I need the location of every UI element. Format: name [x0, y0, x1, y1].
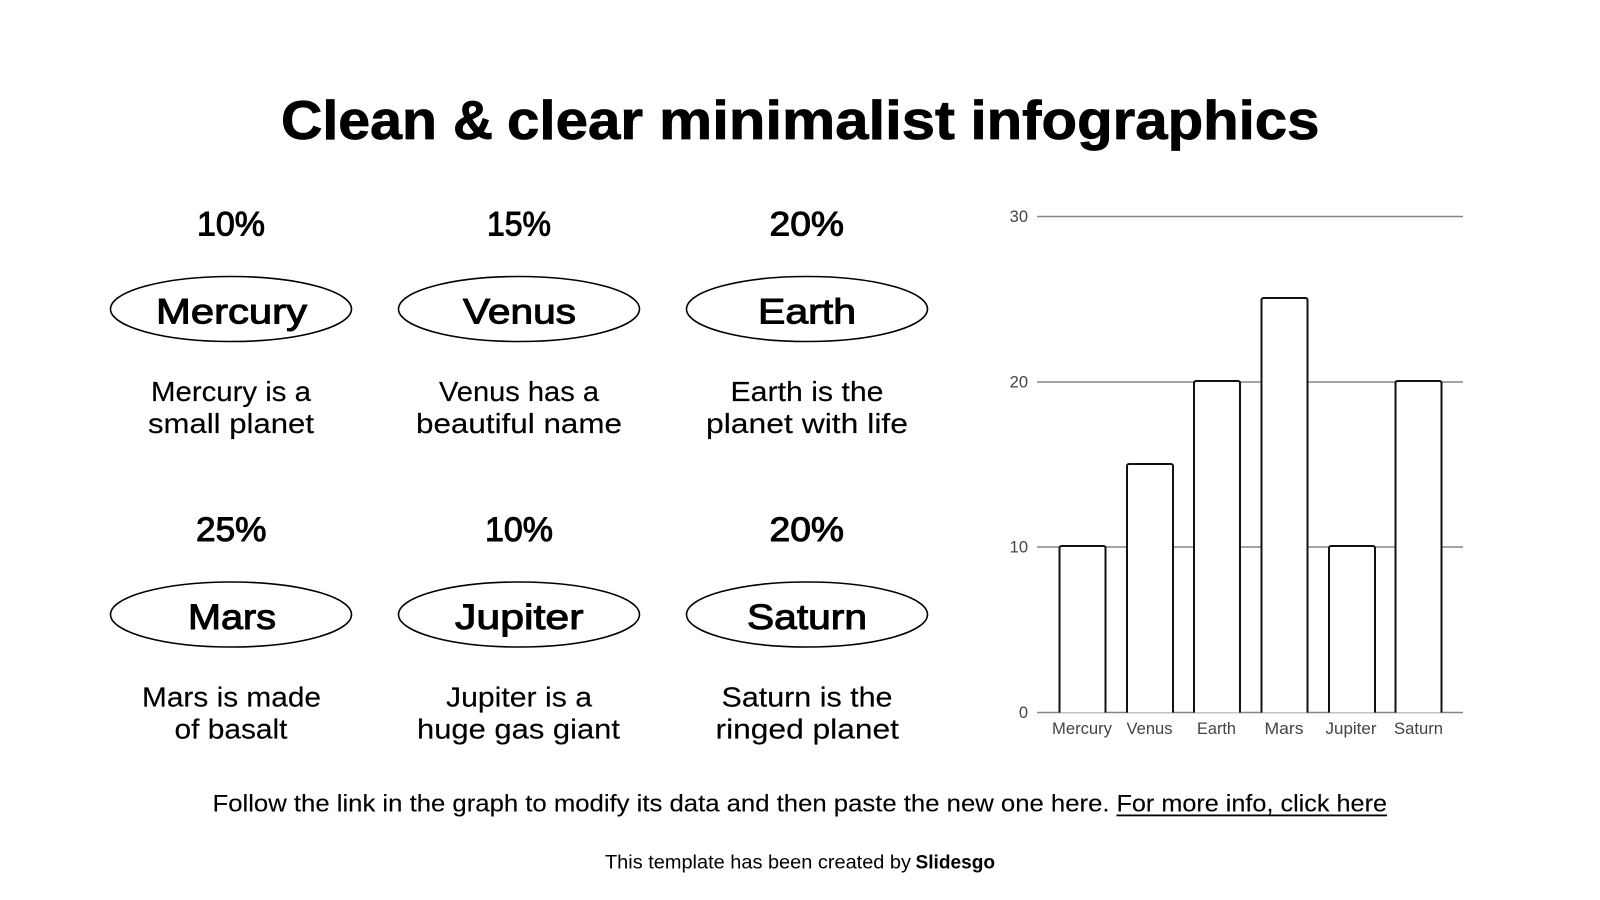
percentage: Mars: 25% [196, 511, 266, 549]
ellipse label: Mars: Mars [188, 598, 276, 637]
link: For more info, click here [1116, 790, 1387, 818]
ellipse label: Earth [686, 276, 928, 342]
bar chart [1010, 208, 1463, 738]
description: Venus [416, 376, 622, 439]
panel: Earth [686, 206, 928, 439]
percentage: Jupiter: 10% [485, 511, 553, 549]
y axis labels: 20 [1010, 374, 1028, 392]
percentage: Earth: 20% [770, 206, 844, 244]
title: Clean [281, 89, 437, 151]
ellipse label: Venus [398, 276, 640, 342]
description: Mercury: small planet [148, 408, 314, 439]
title: & [453, 89, 493, 151]
y axis labels: 30 [1010, 208, 1028, 226]
ellipse label: Mars [110, 582, 352, 647]
bars [1060, 298, 1442, 712]
description: Mars [142, 682, 321, 744]
ellipse label: Saturn [686, 582, 928, 647]
title: clear [507, 89, 643, 151]
title: infographics [970, 89, 1320, 151]
description: Saturn [716, 682, 899, 744]
ellipse label: Mercury [110, 276, 352, 342]
x axis labels: Mercury [1052, 720, 1113, 738]
description: Mercury [148, 376, 314, 439]
panel: Mercury [110, 206, 352, 439]
ellipse label: Jupiter: Jupiter [455, 598, 584, 637]
description: Earth: Earth is the [730, 376, 884, 407]
description: Jupiter: Jupiter is a [446, 682, 592, 712]
description: Venus: beautiful name [416, 408, 622, 439]
instruction text: Follow the link in the graph to modify its data and then paste the new one here. [212, 790, 1110, 818]
ellipse label: Saturn: Saturn [747, 598, 867, 637]
description: Earth: planet with life [706, 408, 908, 439]
panel: Saturn [686, 511, 928, 744]
x axis labels: Saturn [1394, 720, 1443, 738]
x axis labels: Venus [1126, 720, 1172, 738]
percentage: Mercury: 10% [197, 206, 265, 244]
ellipse label: Mercury: Mercury [156, 292, 308, 332]
panel: Venus [398, 206, 640, 439]
description: Earth [706, 376, 908, 439]
description: Saturn: ringed planet [716, 714, 899, 744]
y axis labels: 10 [1010, 538, 1028, 556]
title: minimalist [659, 89, 955, 151]
x axis labels [1052, 720, 1443, 738]
x axis labels: Jupiter [1326, 720, 1377, 738]
ellipse label: Jupiter [398, 582, 640, 647]
title [281, 89, 1320, 151]
description: Mars: of basalt [174, 714, 288, 744]
y axis labels: 0 [1019, 704, 1028, 722]
percentage: Venus: 15% [487, 206, 551, 244]
panel: Mars [110, 511, 352, 744]
ellipse label: Earth: Earth [758, 292, 856, 332]
description: Jupiter [417, 682, 620, 744]
x axis labels: Earth [1197, 720, 1236, 738]
credit line: This template has been created by [605, 852, 912, 874]
percentage: Saturn: 20% [770, 511, 844, 549]
y axis labels [1010, 208, 1028, 722]
x axis labels: Mars [1264, 720, 1304, 738]
description: Mercury: Mercury is a [151, 376, 311, 407]
panel: Jupiter [398, 511, 640, 744]
description: Saturn: Saturn is the [722, 682, 892, 712]
description: Venus: Venus has a [439, 376, 599, 407]
description: Mars: Mars is made [142, 682, 321, 712]
credit line: Slidesgo [916, 852, 995, 874]
description: Jupiter: huge gas giant [417, 714, 620, 744]
ellipse label: Venus: Venus [463, 292, 576, 332]
